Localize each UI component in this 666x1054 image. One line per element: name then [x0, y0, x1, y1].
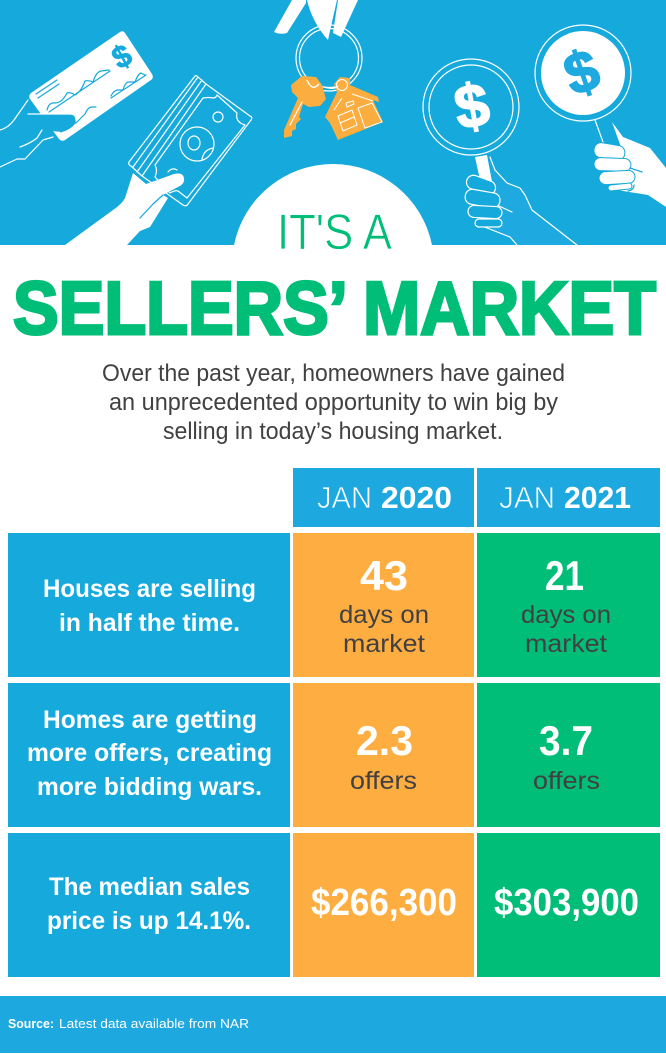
intro text: an unprecedented opportunity to win big by	[109, 389, 558, 416]
row 3 label: price is up 14.1%.	[47, 907, 251, 935]
icon: hand raising solid auction paddle	[535, 25, 666, 207]
column header: Jan 2020	[293, 468, 474, 527]
column header: Jan 2021	[477, 468, 660, 527]
row 1 Jan 2020 value: market	[343, 630, 425, 658]
column header: Jan 2021: JAN	[499, 480, 555, 515]
icon: hand holding cheque: $	[106, 37, 138, 76]
row 1 Jan 2020 value: 43	[360, 552, 408, 599]
row 1 label	[8, 533, 290, 677]
row 2 label	[8, 683, 290, 827]
column header: Jan 2021: 2021	[564, 480, 631, 515]
row 3 Jan 2021 value: $303,900	[494, 882, 639, 924]
title: IT'S A: IT'S A	[277, 204, 393, 260]
row 1 label: in half the time.	[59, 609, 240, 637]
row 2 Jan 2021 value: 3.7	[539, 717, 593, 764]
row 1 Jan 2021 value: days on	[521, 601, 611, 629]
icon: hand raising solid auction paddle: $	[556, 37, 608, 109]
intro text: selling in today’s housing market.	[163, 418, 503, 445]
intro text: Over the past year, homeowners have gained	[102, 360, 565, 387]
footer source bar	[0, 996, 666, 1053]
footer source bar: Source:	[8, 1017, 54, 1031]
row 1 Jan 2020 value: days on	[339, 601, 429, 629]
row 1 Jan 2021 value: market	[525, 630, 607, 658]
title backdrop dome	[234, 164, 432, 245]
row 2 label: more bidding wars.	[37, 773, 262, 801]
icon: auction paddle with outlined dollar sign	[423, 59, 577, 245]
row 2 Jan 2020 value	[293, 683, 474, 827]
row 1 Jan 2021 value	[477, 533, 660, 677]
column header: Jan 2020: 2020	[381, 480, 452, 515]
row 3 label: The median sales	[49, 873, 250, 901]
row 2 Jan 2021 value: offers	[533, 767, 600, 795]
icon: hand holding cheque	[0, 31, 153, 167]
row 2 Jan 2020 value: 2.3	[356, 717, 413, 764]
row 1 Jan 2020 value	[293, 533, 474, 677]
row 3 label	[8, 833, 290, 977]
column header: Jan 2020: JAN	[317, 480, 372, 515]
icon: auction paddle with outlined dollar sign: $	[449, 70, 495, 142]
row 3 Jan 2020 value: $266,300	[311, 882, 457, 924]
icon: hand holding stack of bills	[65, 76, 252, 245]
row 2 Jan 2020 value: offers	[350, 767, 417, 795]
row 2 label: Homes are getting	[43, 706, 257, 734]
row 3 Jan 2020 value	[293, 833, 474, 977]
row 3 Jan 2021 value	[477, 833, 660, 977]
row 2 Jan 2021 value	[477, 683, 660, 827]
banner background	[0, 0, 666, 245]
intro text	[102, 360, 565, 445]
footer source bar: Latest data available from NAR	[59, 1017, 249, 1031]
row 2 label: more offers, creating	[27, 739, 272, 767]
row 1 label: Houses are selling	[43, 575, 256, 603]
icon: hand with house keys on a ring	[274, 0, 383, 140]
row 1 Jan 2021 value: 21	[545, 552, 584, 599]
